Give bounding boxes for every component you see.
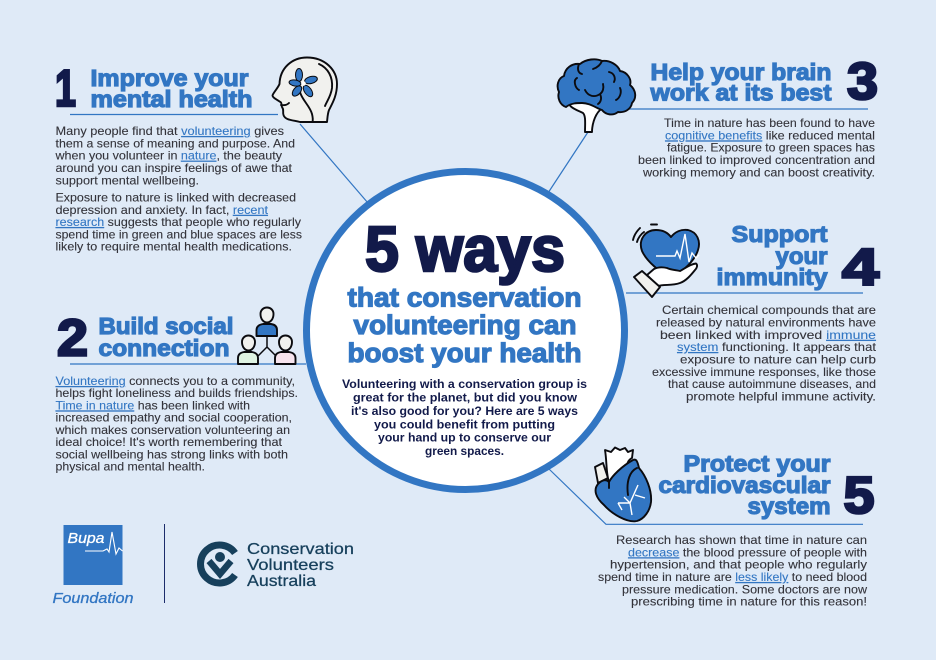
subtitle: that conservation (348, 283, 582, 313)
body text 4: excessive immune responses, like those (652, 365, 876, 379)
logo: Conservation Volunteers Australia (201, 541, 354, 590)
body text 2 (54, 374, 298, 474)
logo: Bupa Foundation (52, 525, 134, 607)
body text 1: when you volunteer in nature, the beauty (54, 149, 282, 163)
logo: Bupa Foundation: Bupa (68, 531, 104, 547)
panel: 4 support your immunity (633, 221, 879, 404)
body text 5: pressure medication. Some doctors are now (622, 582, 867, 596)
body text 2: increased empathy and social cooperation, (56, 411, 292, 425)
body text 1: them a sense of meaning and purpose. And (56, 136, 295, 150)
heading 2 (98, 313, 234, 361)
body text 5: prescribing time in nature for this reason! (631, 595, 867, 609)
heading 3: work at its best (649, 80, 832, 106)
intro text: your hand up to conserve our (378, 431, 551, 445)
body text 2: helps fight loneliness and builds friendships. (56, 386, 298, 400)
heading 1: mental health (90, 86, 252, 112)
body text 2: social wellbeing has strong links with both (56, 447, 288, 461)
body text 3: Time in nature has been found to have (664, 116, 875, 130)
intro text (342, 377, 587, 458)
body text 2: ideal choice! It's worth remembering that (56, 435, 283, 449)
body text 1: likely to require mental health medications. (56, 240, 292, 254)
intro text: it's also good for you? Here are 5 ways (351, 404, 578, 418)
number 5: 5 (844, 467, 874, 525)
logo: Bupa Foundation: Foundation (52, 590, 134, 607)
body text 3: been linked to improved concentration and (638, 153, 875, 167)
central circle (306, 172, 624, 490)
body text 5: spend time in nature are less likely to need blood (598, 570, 867, 584)
body text 4: system functioning. It appears that (677, 340, 877, 354)
intro text: green spaces. (425, 444, 504, 458)
icon: anatomical heart (595, 448, 651, 521)
body text 1: around you can inspire feelings of awe that (56, 161, 293, 175)
icon: hand holding heart (633, 224, 699, 297)
body text 4: released by natural environments have (656, 316, 876, 330)
body text 5: hypertension, and that people who regularly (610, 558, 867, 572)
body text 4: been linked with improved immune (660, 328, 876, 342)
body text 5 (598, 533, 867, 609)
body text 5: Research has shown that time in nature can (616, 533, 867, 547)
heading 5 (658, 451, 831, 519)
body text 3: cognitive benefits like reduced mental (665, 128, 875, 142)
heading 5: Protect your (684, 451, 831, 477)
heading 4: immunity (716, 264, 828, 290)
panel: 1 improve your mental health (54, 58, 337, 254)
body text 1: spend time in green and blue spaces are less (56, 227, 302, 241)
icon: head with flower (272, 58, 337, 122)
body text 4: Certain chemical compounds that are (662, 303, 876, 317)
body text 4: exposure to nature can help curb (680, 352, 876, 366)
body text 3 (638, 116, 875, 179)
subtitle (348, 283, 582, 368)
heading 5: system (748, 493, 830, 519)
intro text: you could benefit from putting (374, 417, 555, 431)
body text 2: Time in nature has been linked with (56, 398, 250, 412)
intro text: great for the planet, but did you know (353, 391, 578, 405)
panel: 2 build social connection (54, 308, 298, 474)
heading 1 (90, 65, 252, 112)
number 4: 4 (842, 239, 879, 297)
heading 2: Build social (98, 313, 234, 339)
body text 4: promote helpful immune activity. (686, 390, 876, 404)
number 2: 2 (57, 310, 88, 368)
heading 3 (649, 59, 832, 106)
icon: brain (558, 59, 635, 132)
main title: 5 ways (365, 213, 565, 285)
heading 5: cardiovascular (658, 472, 831, 498)
intro text: Volunteering with a conservation group is (342, 377, 587, 391)
body text 1 (54, 124, 302, 254)
logo: Conservation Volunteers Australia: Volunteers (247, 557, 334, 574)
body text 2: which makes conservation volunteering an (54, 423, 290, 437)
number 3: 3 (847, 53, 878, 111)
heading 2: connection (98, 335, 230, 361)
logo: Conservation Volunteers Australia: Conservation (247, 541, 354, 558)
subtitle: volunteering can (354, 310, 576, 340)
body text 1: research suggests that people who regularly (56, 215, 301, 229)
subtitle: boost your health (348, 338, 582, 368)
body text 1: support mental wellbeing. (56, 173, 199, 187)
body text 5: decrease the blood pressure of people with (628, 545, 867, 559)
body text 3: working memory and can boost creativity. (642, 165, 875, 179)
body text 2: Volunteering connects you to a community, (56, 374, 295, 388)
panel: 3 help your brain (558, 53, 878, 179)
body text 2: physical and mental health. (56, 460, 205, 474)
body text 4 (652, 303, 877, 404)
icon: three connected people (238, 308, 296, 364)
body text 1: Many people find that volunteering gives (56, 124, 284, 138)
number 1: 1 (55, 60, 76, 118)
heading 3: Help your brain (650, 59, 832, 85)
body text 1: depression and anxiety. In fact, recent (56, 203, 269, 217)
heading 1: Improve your (90, 65, 249, 91)
panel: 5 protect your cardiovascular system (595, 448, 874, 609)
heading 4: your (776, 243, 828, 269)
body text 1: Exposure to nature is linked with decreased (56, 190, 296, 204)
heading 4: Support (732, 221, 828, 247)
body text 3: fatigue. Exposure to green spaces has (667, 141, 875, 155)
body text 4: that cause autoimmune diseases, and (668, 377, 876, 391)
logo: Conservation Volunteers Australia: Australia (247, 573, 316, 590)
heading 4 (716, 221, 828, 290)
